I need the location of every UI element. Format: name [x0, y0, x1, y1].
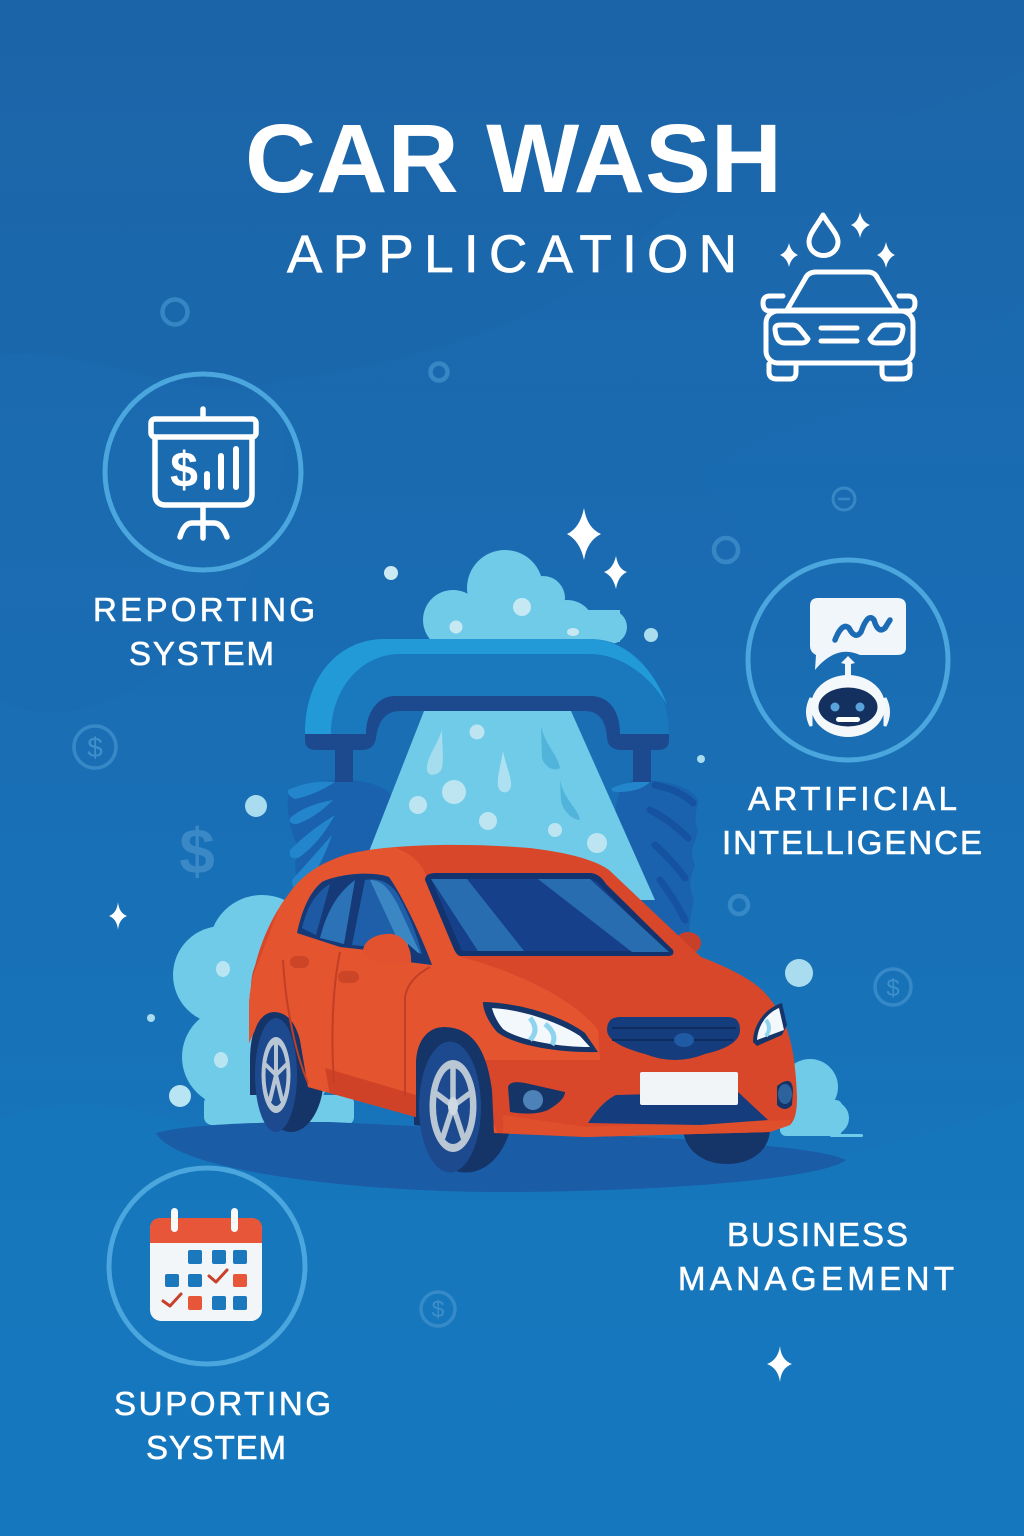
- title: APPLICATION: [287, 225, 737, 284]
- dollar symbols: $: [179, 815, 215, 887]
- car body: [249, 845, 797, 1137]
- label: artificial intelligence: ARTIFICIAL: [748, 780, 957, 817]
- label: supporting system: SUPORTING: [114, 1385, 331, 1422]
- top foam bubbles: [450, 598, 579, 636]
- headlight left: [483, 1002, 598, 1052]
- icon ring: ai: [748, 560, 948, 760]
- ground shadow: [156, 1122, 846, 1192]
- headlight right: [753, 1003, 787, 1046]
- side mirror: [363, 934, 432, 965]
- foam: right: [780, 1059, 863, 1137]
- label: supporting system: [114, 1385, 331, 1466]
- wheel arches: [250, 1010, 496, 1135]
- light beam: [350, 711, 655, 900]
- car: [240, 845, 797, 1172]
- rear wheel: [255, 1018, 324, 1132]
- right front wheel: [683, 1128, 770, 1164]
- door handles: [290, 956, 359, 983]
- icon: calendar: [150, 1208, 262, 1321]
- lower vent: [588, 1092, 768, 1125]
- front wheel: [419, 1042, 513, 1172]
- foam bubbles: [169, 961, 230, 1107]
- dollar symbols: $: [87, 732, 103, 763]
- title: CAR WASH: [245, 104, 782, 213]
- panel: business management: BUSINESS: [727, 1216, 908, 1253]
- title: [245, 104, 782, 284]
- brush: right: [612, 780, 698, 945]
- side panels highlight: [240, 846, 790, 1140]
- windshield: [425, 873, 673, 956]
- label: artificial intelligence: [722, 780, 982, 861]
- grille: [607, 1017, 740, 1060]
- panel: reporting system: [93, 374, 315, 672]
- dollar symbols: [87, 732, 900, 1322]
- tail light: [251, 945, 267, 987]
- panel: business management: MANAGEMENT: [678, 1260, 954, 1297]
- icon: car with water drop: [763, 212, 915, 379]
- side windows: [297, 874, 432, 965]
- foam: top: [423, 550, 627, 656]
- panel: supporting system: [109, 1168, 331, 1466]
- door lines: [283, 952, 430, 1097]
- decorative rings and coins: [74, 300, 911, 1326]
- label: reporting system: SYSTEM: [129, 635, 274, 672]
- licence plate: [640, 1072, 738, 1105]
- panel: business management: [678, 1216, 954, 1297]
- icon: presentation board: $: [170, 442, 198, 498]
- panel: artificial intelligence: [722, 560, 982, 861]
- water drops: [409, 724, 607, 853]
- icon: robot with speech bubble: [808, 598, 906, 737]
- fog lamps: [508, 1081, 793, 1114]
- label: artificial intelligence: INTELLIGENCE: [722, 824, 982, 861]
- icon: presentation board: [151, 409, 256, 538]
- floating bubbles: [147, 566, 813, 1022]
- dollar symbols: $: [886, 975, 900, 1002]
- sparkles: [109, 508, 792, 1382]
- label: supporting system: SYSTEM: [146, 1429, 286, 1466]
- right mirror: [675, 932, 701, 954]
- label: reporting system: REPORTING: [93, 591, 315, 628]
- foam: left: [173, 895, 354, 1125]
- label: reporting system: [93, 591, 315, 672]
- icon ring: calendar: [109, 1168, 305, 1364]
- brush: left: [288, 780, 394, 905]
- icon ring: reporting: [105, 374, 301, 570]
- illustration: car wash scene: [156, 550, 863, 1192]
- posts: [335, 748, 651, 782]
- gantry arch: [305, 639, 669, 750]
- dollar symbols: $: [432, 1296, 445, 1322]
